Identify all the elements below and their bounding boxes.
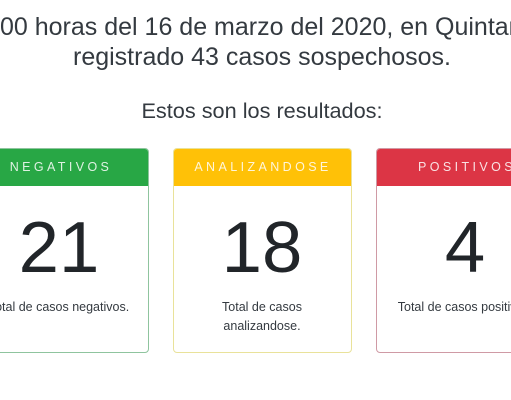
label: analizandose: ANALIZANDOSE: [194, 160, 332, 174]
heading: summary text: [0, 13, 511, 71]
panel: negativos: [0, 148, 149, 353]
subheading: results: Estos son los resultados:: [141, 98, 383, 123]
number: negativos: 21: [19, 207, 99, 288]
panel: positivos: [376, 148, 511, 353]
number: positivos: 4: [445, 207, 485, 288]
text: analizandose: Total de casos: [222, 300, 302, 314]
heading: summary text: registrado 43 casos sospechosos.: [73, 43, 451, 71]
text: analizandose: analizandose.: [223, 319, 301, 333]
label: negativos: NEGATIVOS: [10, 160, 112, 174]
text: analizandose: [222, 300, 302, 333]
number: analizandose: 18: [222, 207, 302, 288]
panel: analizandose: [173, 148, 352, 353]
